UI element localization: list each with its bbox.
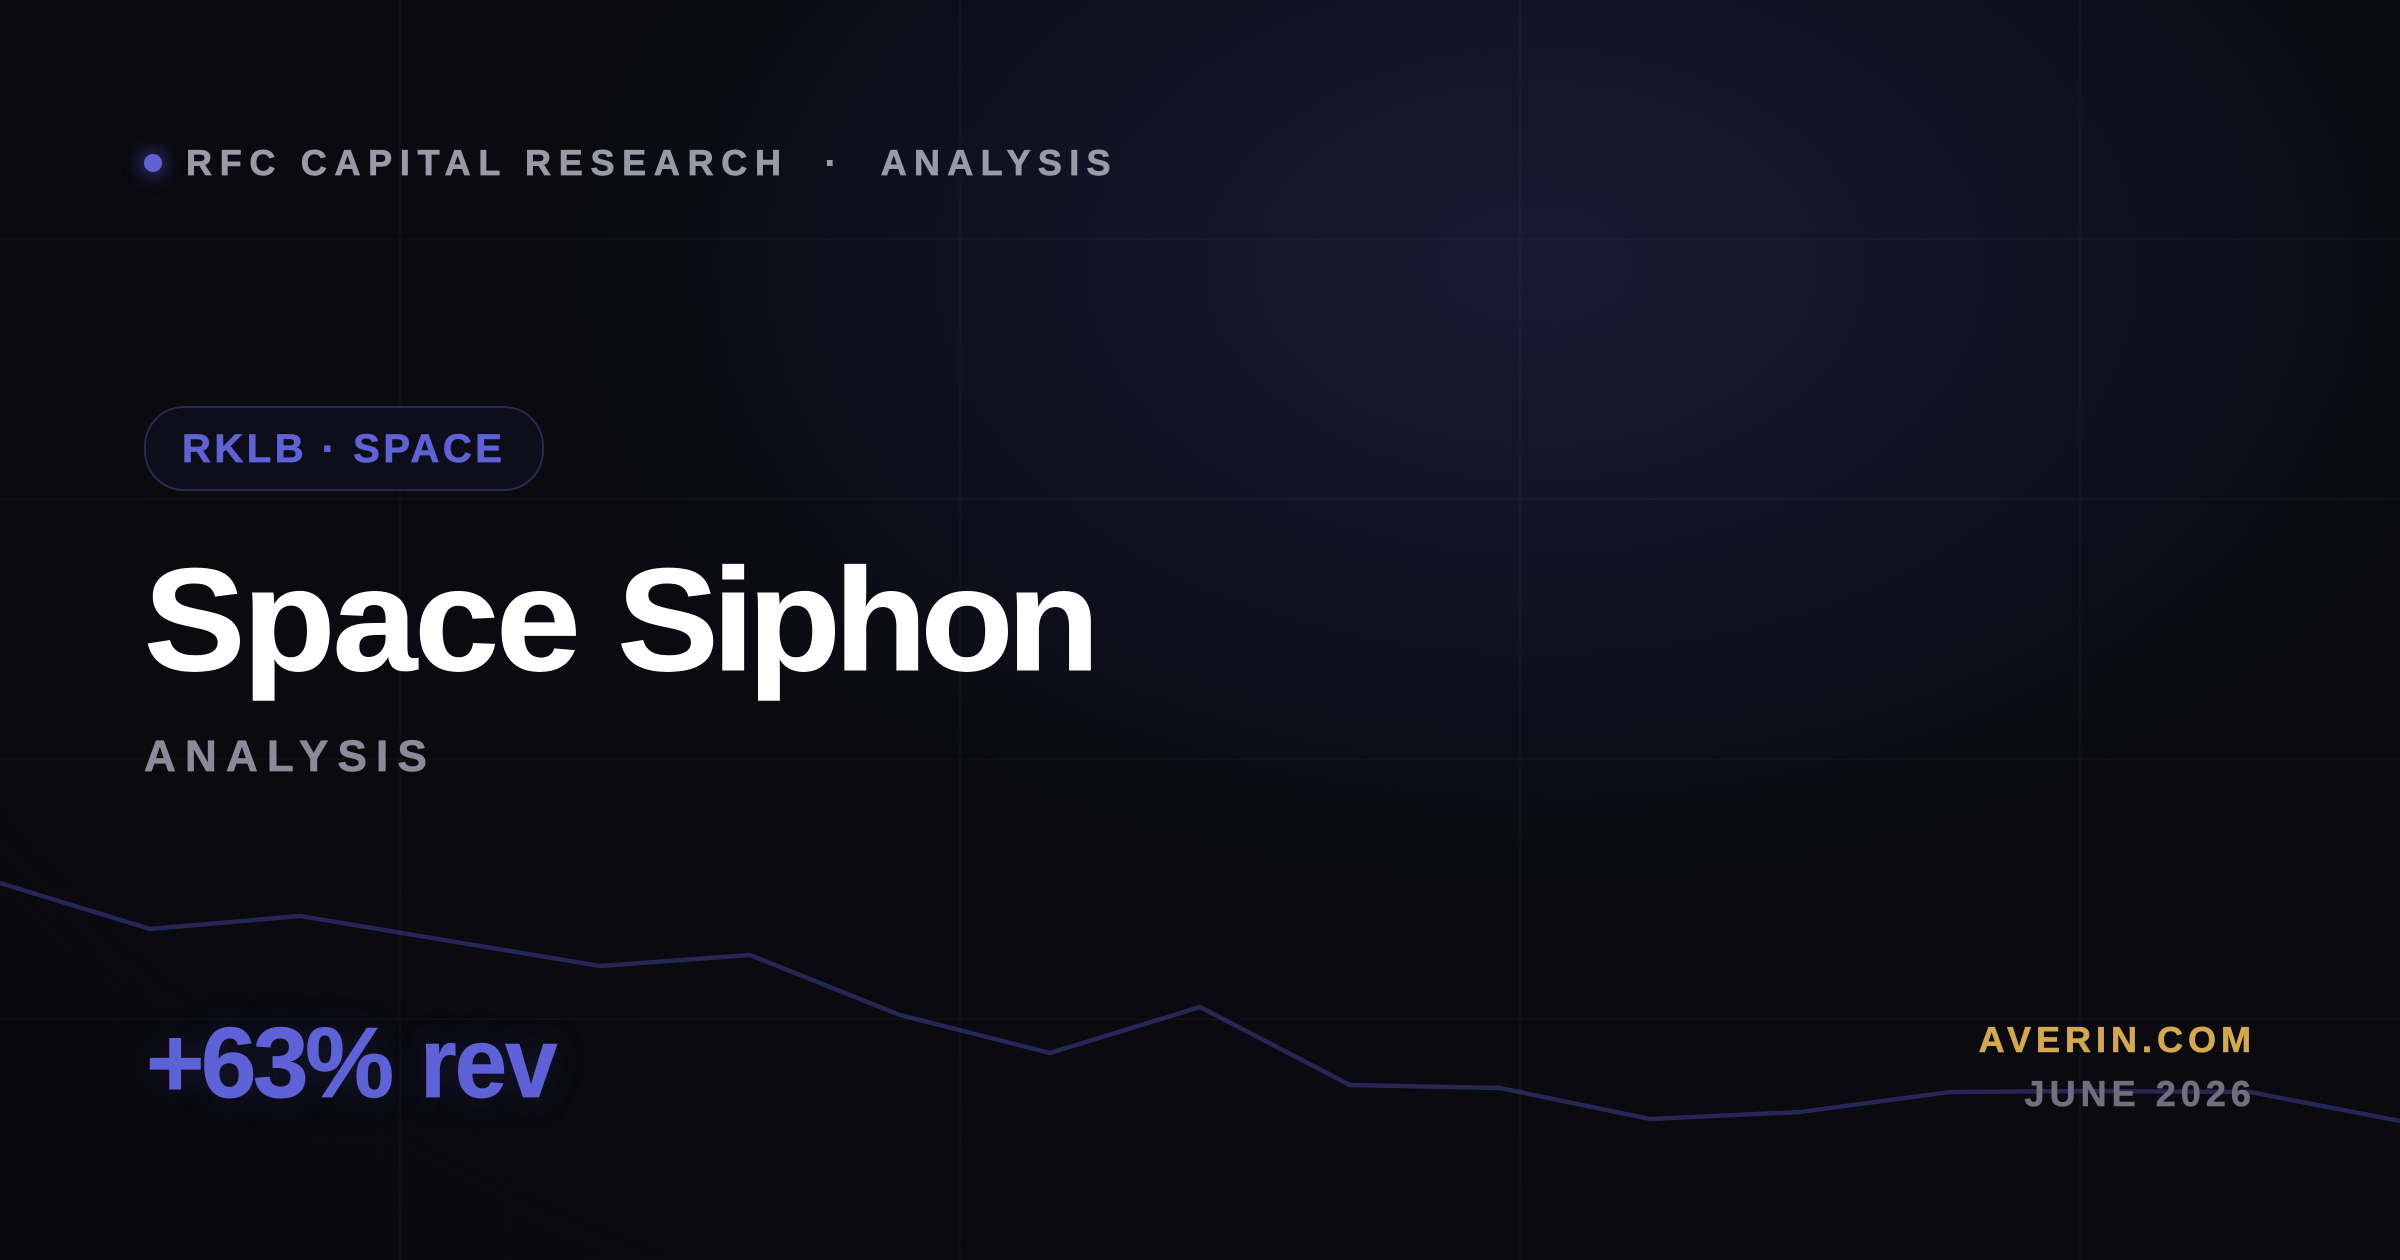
title: Space Siphon <box>144 539 1093 702</box>
eyebrow header <box>131 141 1118 185</box>
icon: status dot <box>144 154 162 172</box>
pill label: RKLB · SPACE <box>182 427 505 471</box>
key metric: rev <box>420 1007 556 1119</box>
key metric: +63% <box>146 1007 391 1119</box>
eyebrow text: RFC CAPITAL RESEARCH · ANALYSIS <box>186 142 1118 183</box>
date: JUNE 2026 <box>2025 1073 2256 1114</box>
key metric <box>146 1007 558 1119</box>
subtitle: ANALYSIS <box>144 732 436 781</box>
footer: site and date <box>1979 1019 2256 1114</box>
ticker pill <box>144 406 544 491</box>
site name: AVERIN.COM <box>1979 1019 2256 1060</box>
